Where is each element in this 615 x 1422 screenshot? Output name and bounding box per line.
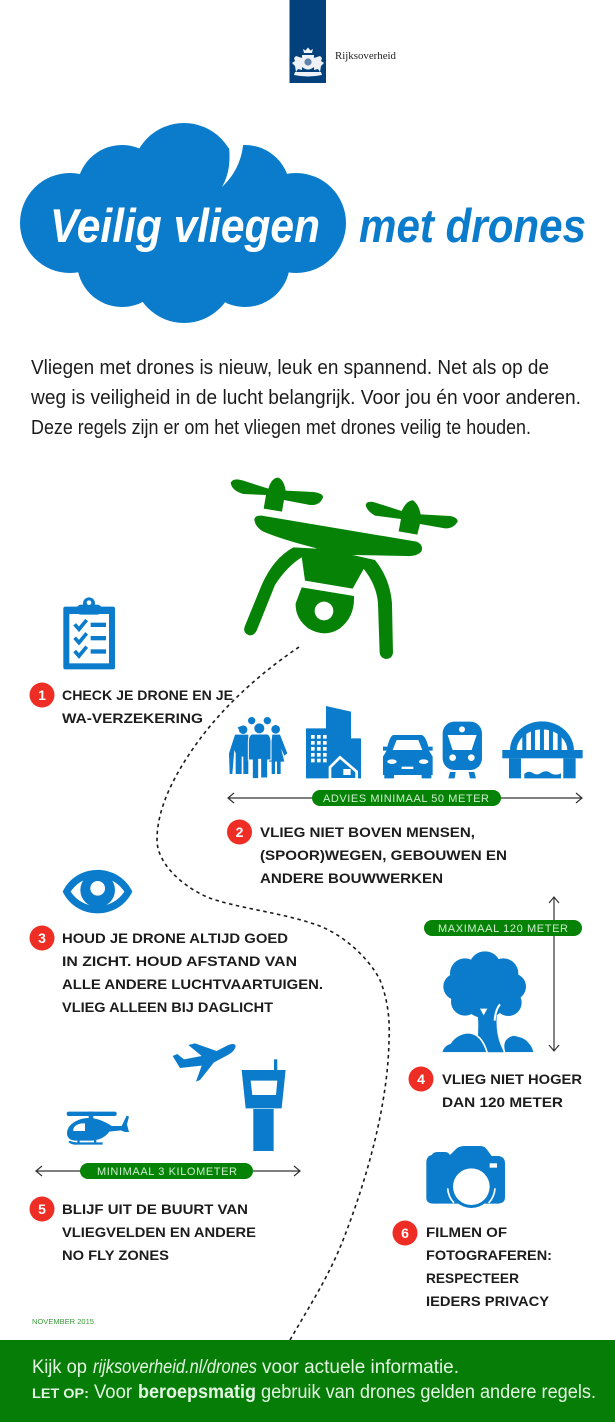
footer banner: beroepsmatig: [138, 1382, 256, 1403]
step 4: 4: [417, 1071, 425, 1087]
icons: people, buildings, car, train, bridge: [229, 706, 583, 779]
step 3: IN ZICHT. HOUD AFSTAND VAN: [62, 953, 297, 969]
step 4: DAN 120 METER: [442, 1094, 563, 1110]
step 3: VLIEG ALLEEN BIJ DAGLICHT: [62, 999, 273, 1015]
distance label: maximaal 120 meter: MAXIMAAL 120 METER: [438, 923, 568, 935]
icon: bridge: [502, 721, 583, 778]
icon: people: [229, 717, 287, 779]
step 3: ALLE ANDERE LUCHTVAARTUIGEN.: [62, 976, 323, 992]
step 2: ANDERE BOUWWERKEN: [260, 870, 443, 886]
step 1: CHECK JE DRONE EN JE: [62, 687, 233, 703]
distance label: advies minimaal 50 meter: ADVIES MINIMAAL 50 METER: [323, 793, 489, 805]
icon: camera: [426, 1146, 505, 1208]
step 5: VLIEGVELDEN EN ANDERE: [62, 1224, 256, 1240]
title: met drones: met drones: [359, 199, 586, 252]
icon: car: [383, 735, 433, 778]
step 5: 5: [38, 1201, 46, 1217]
step 2: (SPOOR)WEGEN, GEBOUWEN EN: [260, 847, 507, 863]
icon: buildings: [306, 706, 361, 779]
footer banner: rijksoverheid.nl/drones: [93, 1357, 257, 1378]
dotted flight path: [157, 647, 389, 1340]
footer banner: Voor: [94, 1382, 133, 1403]
step 5: NO FLY ZONES: [62, 1247, 169, 1263]
step 6: [392, 1220, 552, 1309]
step 3: [30, 926, 323, 1015]
footer banner: Kijk op: [32, 1357, 87, 1378]
step 4: [408, 1066, 582, 1110]
footer banner: [0, 1340, 615, 1422]
height arrow: [549, 897, 559, 1051]
step 3: 3: [38, 930, 46, 946]
icon: drone: [231, 478, 458, 659]
distance label: maximaal 120 meter: [424, 920, 582, 936]
step 1: [30, 682, 233, 726]
step 3: HOUD JE DRONE ALTIJD GOED: [62, 930, 288, 946]
icon: helicopter: [67, 1112, 129, 1145]
icon: train: [443, 722, 482, 778]
icons: helicopter, plane, tower: [67, 1043, 286, 1151]
distance label: minimaal 3 kilometer: [36, 1163, 300, 1179]
logo: Rijksoverheid: [290, 0, 397, 83]
cloud with title: Veilig vliegen: [50, 199, 320, 252]
icon: eye: [63, 870, 132, 913]
icon: tree: [437, 951, 540, 1054]
distance label: advies minimaal 50 meter: [228, 790, 582, 806]
icon: plane: [173, 1043, 236, 1082]
footer banner: LET OP:: [32, 1385, 89, 1401]
intro text: Deze regels zijn er om het vliegen met drones veilig te houden.: [31, 417, 531, 439]
step 6: 6: [401, 1225, 409, 1241]
intro text: [30, 357, 581, 439]
step 5: [30, 1196, 256, 1263]
distance label: minimaal 3 kilometer: MINIMAAL 3 KILOMETER: [97, 1166, 237, 1178]
footer banner: gebruik van drones gelden andere regels.: [261, 1382, 596, 1403]
step 6: RESPECTEER: [426, 1270, 519, 1286]
intro text: Vliegen met drones is nieuw, leuk en spannend. Net als op de: [31, 357, 549, 379]
step 6: FOTOGRAFEREN:: [426, 1247, 552, 1263]
intro text: weg is veiligheid in de lucht belangrijk. Voor jou én voor anderen.: [30, 387, 581, 409]
step 2: VLIEG NIET BOVEN MENSEN,: [260, 824, 475, 840]
step 1: 1: [38, 687, 46, 703]
step 4: VLIEG NIET HOGER: [442, 1071, 582, 1087]
step 6: IEDERS PRIVACY: [426, 1293, 550, 1309]
icon: clipboard: [63, 597, 115, 669]
footer banner: voor actuele informatie.: [262, 1357, 459, 1378]
cloud with title: [20, 123, 346, 323]
step 2: [227, 820, 507, 886]
step 5: BLIJF UIT DE BUURT VAN: [62, 1201, 248, 1217]
step 1: WA-VERZEKERING: [62, 710, 203, 726]
step 2: 2: [236, 824, 244, 840]
date: NOVEMBER 2015: [32, 1319, 94, 1326]
icon: control tower: [242, 1059, 286, 1151]
logo: Rijksoverheid: Rijksoverheid: [335, 51, 397, 62]
step 6: FILMEN OF: [426, 1224, 507, 1240]
